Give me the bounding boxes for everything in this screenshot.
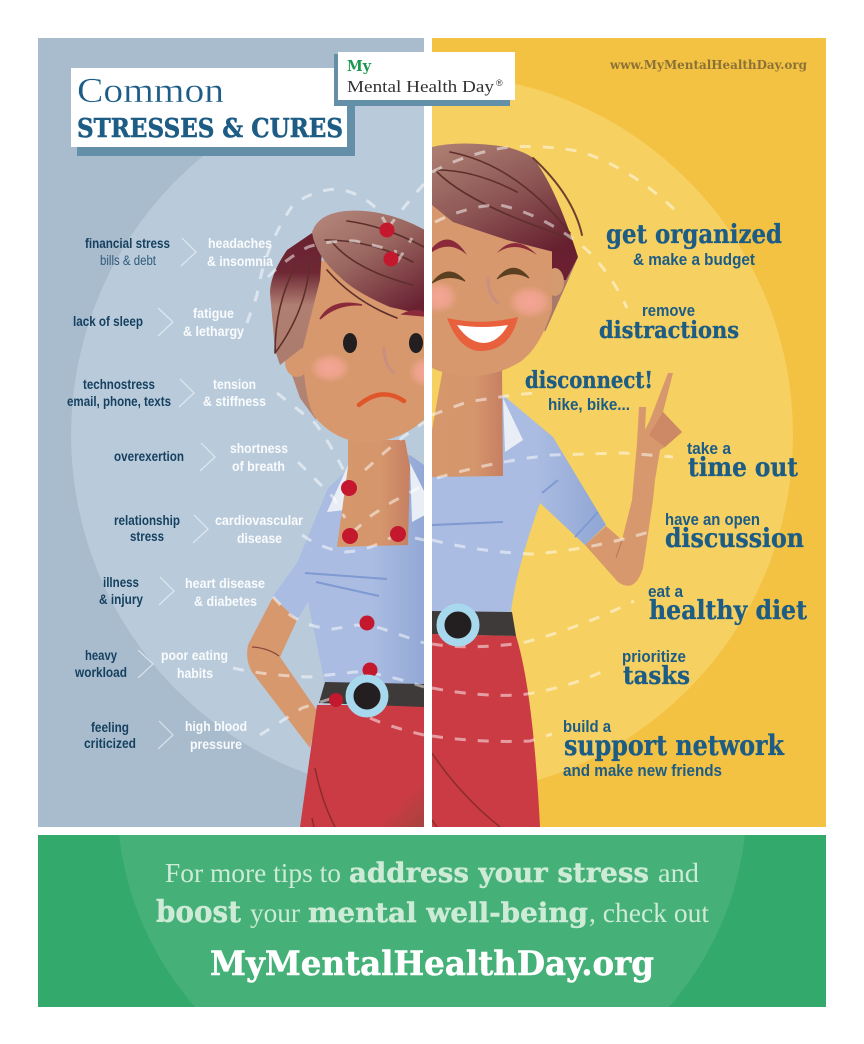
illustration: stressed woman (left half) <box>247 210 424 827</box>
belt buckle right <box>440 608 476 642</box>
belt buckle left <box>350 678 384 714</box>
take a time out: take a <box>687 440 732 458</box>
frown <box>359 394 404 405</box>
have an open discussion: discussion <box>665 524 804 554</box>
heavy workload: poor eating <box>161 647 228 663</box>
feeling criticized: pressure <box>190 736 242 752</box>
lack of sleep: & lethargy <box>183 323 244 339</box>
heavy workload: habits <box>177 665 213 681</box>
right blush <box>432 282 456 312</box>
left pants <box>300 705 424 827</box>
footer line 1: address your stress <box>349 858 649 889</box>
heavy workload: heavy <box>85 648 117 663</box>
technostress: email, phone, texts <box>67 394 171 409</box>
overexertion <box>114 440 288 474</box>
footer banner <box>38 835 826 1007</box>
illness and injury: heart disease <box>185 575 265 591</box>
right eyebrows <box>432 239 537 255</box>
left ear <box>285 348 304 377</box>
left neck <box>337 440 410 547</box>
left back hair <box>270 233 322 365</box>
title: Common <box>77 71 224 110</box>
hair behind ear <box>544 256 578 332</box>
technostress <box>67 376 266 409</box>
heavy workload: workload <box>74 665 127 680</box>
footer line 1: For more tips to <box>165 858 341 888</box>
prioritize tasks: tasks <box>623 661 690 690</box>
smile <box>447 317 518 351</box>
have an open discussion <box>665 511 804 554</box>
financial stress: financial stress <box>85 236 170 251</box>
right belt <box>432 611 516 636</box>
right smiling eyes <box>432 268 529 283</box>
technostress: tension <box>213 376 256 392</box>
relationship stress: relationship <box>114 513 180 528</box>
footer line 1 <box>165 858 700 889</box>
feeling criticized <box>84 718 247 752</box>
right face <box>432 205 552 376</box>
footer line 2: , check out <box>589 898 710 928</box>
disconnect: disconnect! <box>525 367 653 394</box>
logo <box>334 52 515 106</box>
build a support network: support network <box>564 729 784 762</box>
illness and injury: illness <box>103 575 139 590</box>
get organized: get organized <box>606 220 782 250</box>
logo: ® <box>496 78 503 88</box>
left collar <box>327 463 425 522</box>
right fringe <box>432 144 578 257</box>
prioritize tasks: prioritize <box>622 648 686 666</box>
website url: www.MyMentalHealthDay.org <box>609 58 808 72</box>
eat a healthy diet <box>648 583 807 626</box>
right arm and raised hand <box>585 373 682 586</box>
lack of sleep: fatigue <box>193 305 234 321</box>
get organized: & make a budget <box>633 251 755 269</box>
left arm <box>247 597 318 748</box>
right collar <box>503 398 523 452</box>
eat a healthy diet: eat a <box>648 583 684 601</box>
right shirt <box>432 395 606 612</box>
relationship stress: cardiovascular <box>215 512 303 528</box>
remove distractions: remove <box>642 302 695 320</box>
title: STRESSES & CURES <box>77 114 343 144</box>
left nose <box>384 348 394 373</box>
financial stress: & insomnia <box>207 253 273 269</box>
left shirt <box>273 455 424 684</box>
hair behind jaw <box>292 347 316 420</box>
footer line 2 <box>156 895 710 930</box>
lack of sleep <box>73 305 244 339</box>
panel: cures (right) <box>432 38 826 827</box>
illustration: happy woman (right half) <box>417 144 682 827</box>
illness and injury <box>99 575 265 609</box>
build a support network: and make new friends <box>563 762 722 780</box>
financial stress <box>85 235 273 269</box>
take a time out: time out <box>688 453 798 483</box>
footer url: MyMentalHealthDay.org <box>210 944 654 984</box>
overexertion: of breath <box>232 458 285 474</box>
get organized <box>606 220 782 269</box>
relationship stress: stress <box>130 529 164 544</box>
left fringe <box>312 211 425 315</box>
cures list <box>525 220 807 780</box>
footer line 2: mental well-being <box>308 898 588 929</box>
left eyes <box>343 333 357 353</box>
disconnect <box>525 367 653 414</box>
left face <box>303 260 424 440</box>
technostress: technostress <box>83 377 155 392</box>
take a time out <box>687 440 798 483</box>
prioritize tasks <box>622 648 690 690</box>
remove distractions <box>599 302 739 344</box>
overexertion: overexertion <box>114 449 184 464</box>
remove distractions: distractions <box>599 317 739 344</box>
left blush <box>312 355 348 382</box>
dashed connector lines <box>233 184 424 735</box>
right nose <box>488 278 498 303</box>
have an open discussion: have an open <box>665 511 760 529</box>
left eyebrows <box>320 303 425 319</box>
stress points: red dots <box>329 222 406 707</box>
heavy workload <box>74 647 228 681</box>
footer line 2: boost <box>156 895 241 930</box>
relationship stress <box>114 512 303 546</box>
illness and injury: & injury <box>99 592 143 607</box>
build a support network <box>563 718 784 780</box>
dashed connector lines (right) <box>432 147 680 741</box>
feeling criticized: criticized <box>84 736 136 751</box>
feeling criticized: high blood <box>185 718 247 734</box>
right pants <box>432 634 540 827</box>
overexertion: shortness <box>230 440 288 456</box>
financial stress: headaches <box>208 235 272 251</box>
right neck <box>432 368 503 477</box>
right ear <box>552 268 564 296</box>
logo: My <box>347 57 372 75</box>
feeling criticized: feeling <box>91 720 129 735</box>
relationship stress: disease <box>237 530 282 546</box>
lack of sleep: lack of sleep <box>73 314 143 329</box>
footer line 1: and <box>658 858 700 888</box>
stress list <box>67 235 303 752</box>
technostress: & stiffness <box>203 393 266 409</box>
illness and injury: & diabetes <box>194 593 257 609</box>
financial stress: bills & debt <box>100 253 156 268</box>
left belt <box>319 682 424 707</box>
footer line 2: your <box>250 898 300 928</box>
build a support network: build a <box>563 718 612 736</box>
logo: Mental Health Day <box>347 77 495 96</box>
disconnect: hike, bike... <box>548 396 630 414</box>
title <box>71 68 355 156</box>
panel: stresses (left) <box>38 38 424 827</box>
eat a healthy diet: healthy diet <box>649 596 807 626</box>
